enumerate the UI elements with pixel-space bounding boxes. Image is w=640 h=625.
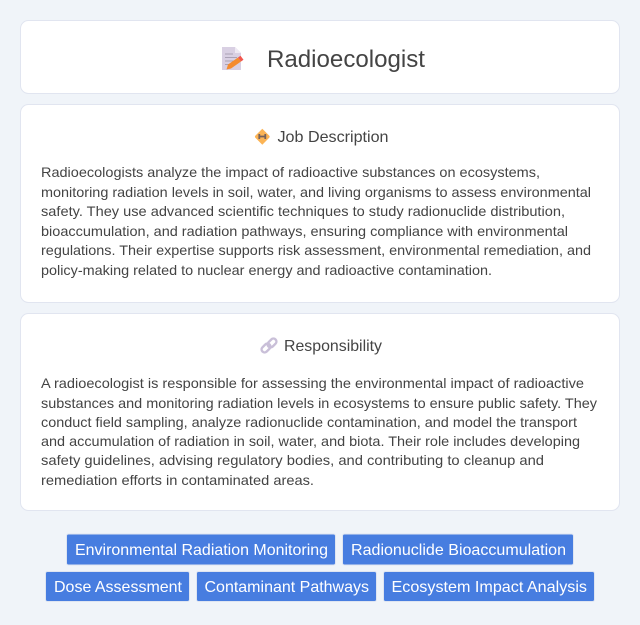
icon: chain link [260,337,278,354]
text block: job description: regulations. Their expertise supports risk assessment, environmental remediation, and [41,242,591,258]
panel: responsibility [20,314,620,510]
tag: environmental radiation monitoring: Environmental Radiation Monitoring [75,542,328,559]
panel: title card [20,20,620,94]
text block: responsibility: A radioecologist is responsible for assessing the environmental impact of radioactive [41,375,584,391]
text block: responsibility: conduct field sampling, analyze radionuclide contamination, and model the transport [41,414,577,430]
tag: dose assessment [46,572,190,602]
tag: radionuclide bioaccumulation [342,534,574,565]
heading: job description: Job Description [278,129,388,146]
tag: contaminant pathways [196,572,376,602]
text block: job description: bioaccumulation, and radiation pathways, ensuring compliance with environmental [41,223,568,239]
text block: responsibility: and accumulation of radiation in soil, water, and biota. Their role includes developing [41,433,580,449]
icon: diamond sign [255,129,270,145]
title: Radioecologist [267,46,425,73]
text block: job description: safety. They use advanced scientific techniques to study radionuclide distribution, [41,203,565,219]
tag group [46,534,594,602]
tag: ecosystem impact analysis: Ecosystem Impact Analysis [392,579,587,596]
panel: job description [20,104,620,302]
text block: responsibility: safety guidelines, advising regulatory bodies, and contributing to cleanup and [41,452,544,468]
tag: radionuclide bioaccumulation: Radionuclide Bioaccumulation [351,542,566,559]
icon: document with pencil [222,47,244,70]
text block: job description: policy-making related to nuclear energy and radioactive contamination. [41,262,492,278]
tag: contaminant pathways: Contaminant Pathways [204,579,369,596]
tag: environmental radiation monitoring [66,534,336,565]
text block: job description: monitoring radiation levels in soil, water, and living organisms to assess environmental [41,184,591,200]
tag: dose assessment: Dose Assessment [54,579,183,596]
text block: job description: Radioecologists analyze the impact of radioactive substances on ecosystems, [41,164,540,180]
text block: responsibility: remediation efforts in contaminated areas. [41,472,314,488]
text block: responsibility: substances and monitoring radiation levels in ecosystems to ensure public safety. They [41,395,597,411]
heading: responsibility: Responsibility [284,338,382,355]
text block: responsibility [41,375,597,488]
tag: ecosystem impact analysis [384,572,594,602]
text block: job description [41,164,591,278]
